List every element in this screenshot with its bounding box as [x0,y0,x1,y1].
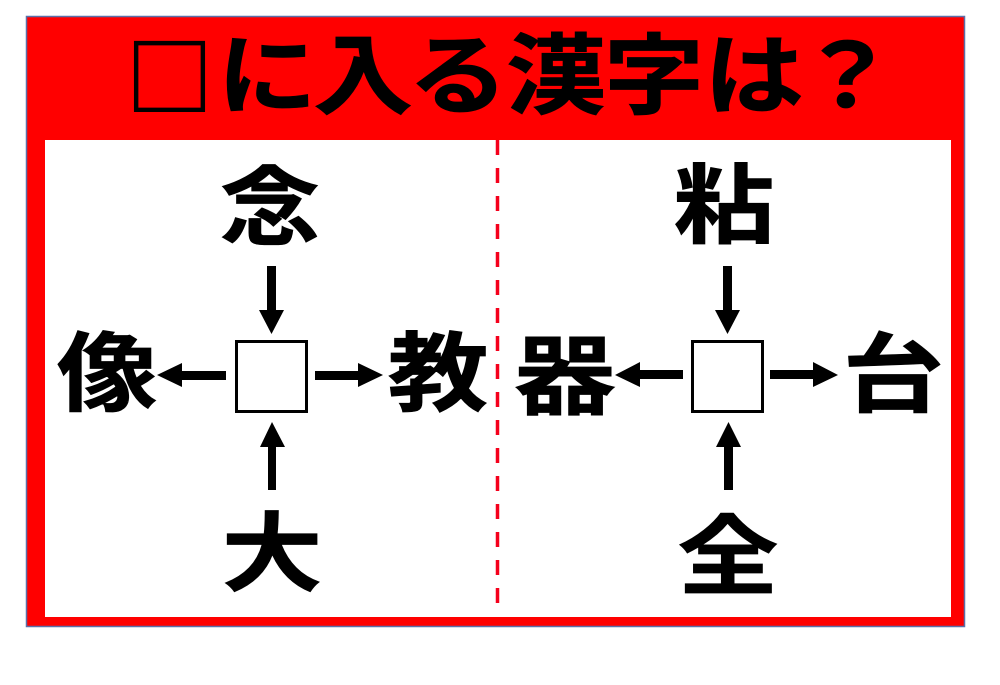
center blank box [236,342,306,412]
arrow up [260,422,285,490]
left puzzle [57,160,488,602]
arrow left [615,362,683,387]
arrow right [315,363,383,387]
kanji left: 器: 器 [515,329,615,425]
arrow down [259,266,284,334]
kanji left: 像: 像 [57,326,157,422]
dashed divider [496,140,499,607]
kanji bottom: 大: 大 [222,506,322,602]
arrow down [715,266,740,334]
kanji bottom: 全: 全 [678,509,778,605]
right puzzle [515,158,943,605]
white puzzle panel [45,140,951,617]
arrow left [157,363,226,387]
kanji top: 粘: 粘 [674,158,774,254]
kanji top: 念: 念 [220,160,320,256]
title: □ [134,5,206,138]
arrow right [770,362,838,387]
title: に入る漢字は？ [217,28,897,126]
center blank box [692,342,762,412]
title [134,5,897,138]
arrow up [716,422,741,490]
kanji right: 台: 台 [843,327,943,423]
kanji right: 教: 教 [388,326,488,422]
